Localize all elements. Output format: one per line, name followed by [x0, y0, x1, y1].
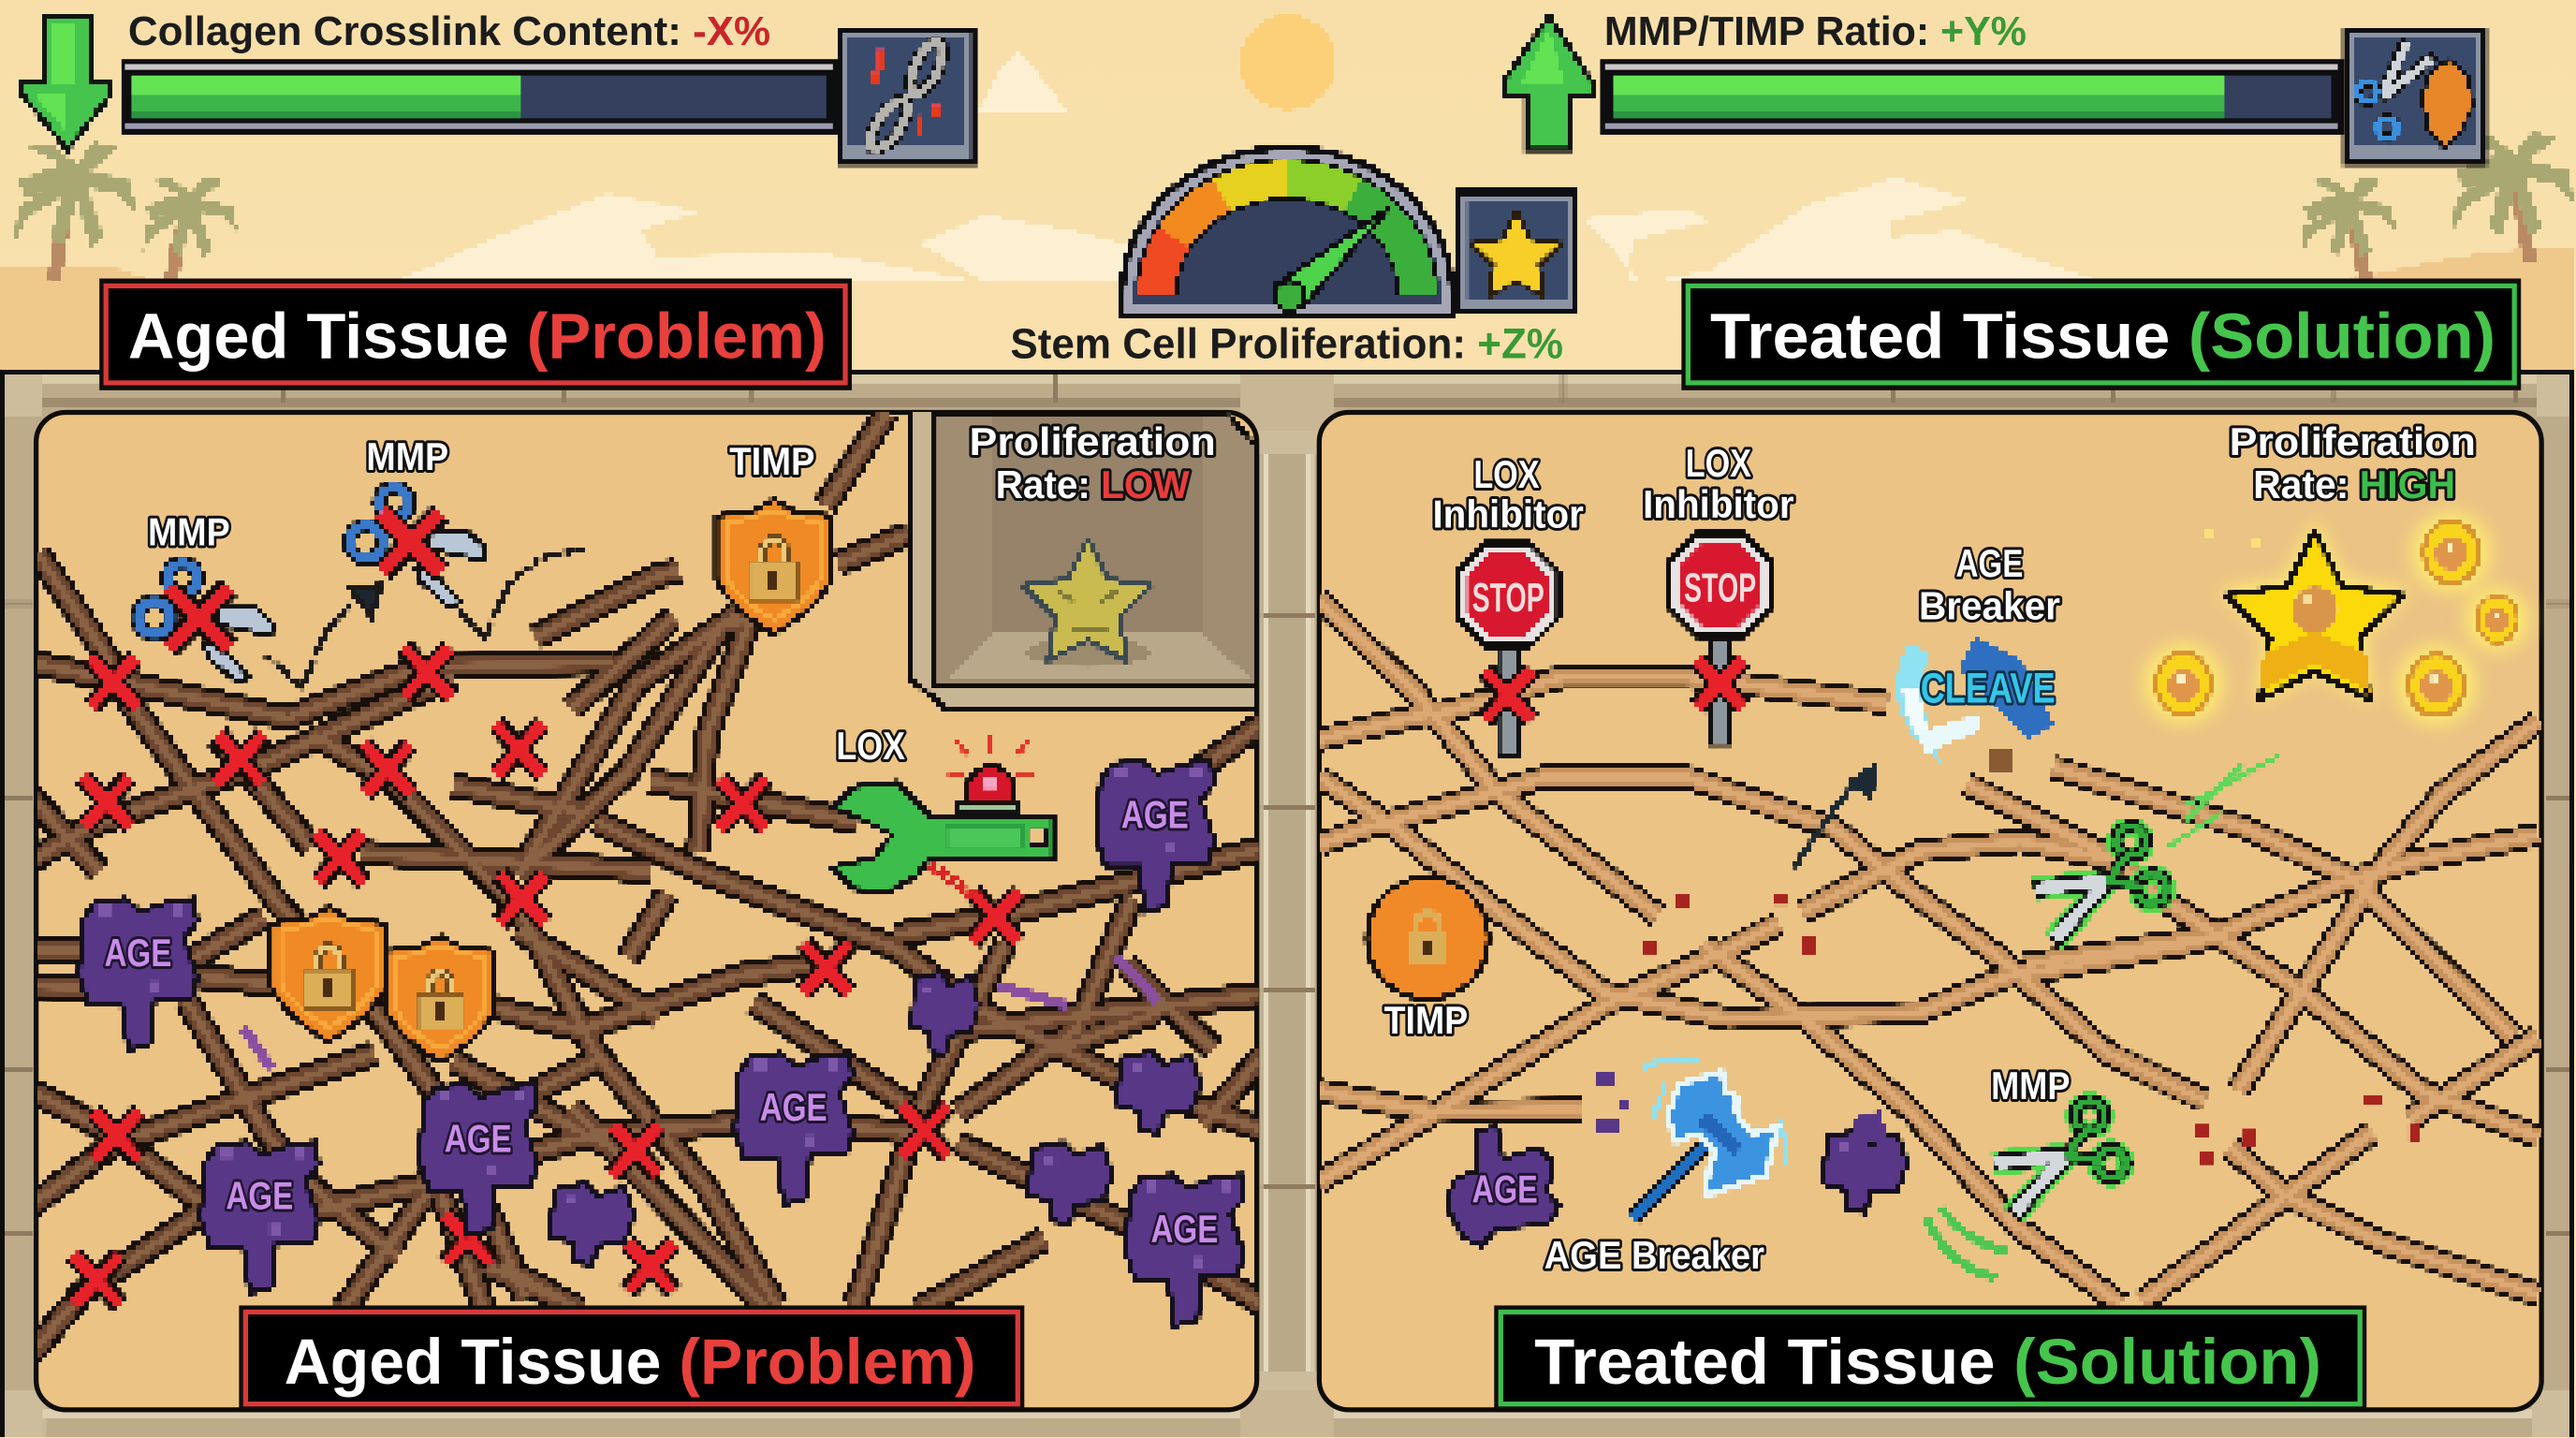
- proliferation rate high: [2144, 419, 2528, 725]
- AGE blob 2: [200, 1142, 318, 1293]
- palm trees: [15, 131, 2574, 283]
- LOX inhibitor 1: LOX: [1473, 452, 1540, 496]
- TIMP circle: TIMP: [1384, 998, 1468, 1042]
- AGE blob 3: [419, 1084, 537, 1236]
- AGE blob treated: [1447, 1127, 1559, 1245]
- icon: twin TIMP shields: [271, 907, 494, 1063]
- icon: stop sign: [1666, 531, 1775, 744]
- LOX inhibitor 2: [1643, 441, 1794, 744]
- icon: stop sign: [1454, 540, 1562, 756]
- heading: aged tissue bottom: [242, 1308, 1022, 1410]
- AGE breaker cleave: CLEAVE: [1921, 664, 2056, 712]
- star glow: [2144, 513, 2528, 725]
- LOX enzyme: [833, 724, 1053, 897]
- panel: aged tissue: [28, 413, 1265, 1410]
- icon: green wrench with alarm: [833, 735, 1053, 897]
- LOX inhibitor 1: Inhibitor: [1432, 492, 1584, 536]
- rate text: Rate: HIGH: [2253, 462, 2455, 506]
- stat: collagen crosslink content: [23, 8, 976, 166]
- unlabeled AGE blobs and smears: [243, 956, 1201, 1265]
- gauge label: Stem Cell Proliferation: +Z%: [1010, 320, 1563, 368]
- icon: green scissors upper: [2034, 756, 2280, 942]
- icon: scissors and shield: [2343, 26, 2487, 166]
- TIMP circle: [1367, 877, 1488, 1042]
- stat label: MMP/TIMP Ratio: +Y%: [1604, 8, 2027, 54]
- AGE blob 5: [1096, 761, 1214, 912]
- icon: broken chain: [836, 26, 976, 166]
- LOX inhibitor 2: Inhibitor: [1643, 482, 1794, 526]
- progress bar: crosslink: [122, 59, 838, 135]
- icon: green scissors: [1925, 1101, 2126, 1278]
- rate text: [2230, 419, 2476, 506]
- gauge dial: [1119, 144, 1456, 317]
- icon: coins: [2154, 520, 2519, 718]
- icon: blocked scissors: [138, 564, 274, 683]
- AGE blob 4: [735, 1053, 853, 1204]
- inset stone box: [909, 413, 1257, 710]
- enzyme: MMP left: [138, 510, 274, 683]
- LOX inhibitor 2: LOX: [1686, 441, 1751, 485]
- AGE blob 2: AGE: [226, 1174, 293, 1218]
- progress bar: ratio: [1600, 59, 2345, 135]
- stat: MMP/TIMP ratio: [1503, 8, 2487, 166]
- collagen fibers: loosened and cleaved: [1319, 600, 2539, 1305]
- stat label: Collagen Crosslink Content: -X%: [128, 8, 770, 54]
- icon: bright star: [2226, 531, 2404, 700]
- AGE blob 4: AGE: [760, 1085, 827, 1129]
- AGE deposits: [79, 761, 1244, 1326]
- panel background: [1319, 413, 2541, 1410]
- arrows: dashed motion paths: [266, 549, 583, 687]
- heading: aged tissue bottom: Aged Tissue (Problem): [285, 1326, 976, 1398]
- AGE blob 1: [79, 899, 198, 1050]
- panel: treated tissue: [1319, 413, 2541, 1410]
- icon: purple blob fragment: [1597, 1071, 1908, 1212]
- TIMP inhibitor shield: [716, 439, 831, 634]
- panel background: [37, 413, 1257, 1410]
- sand dunes: [0, 250, 2576, 394]
- heading: treated tissue top: Treated Tissue (Solution): [1710, 301, 2496, 373]
- icon: blue battle axe: [1633, 1058, 1788, 1219]
- sun: [1240, 15, 1336, 110]
- enzyme: MMP left: MMP: [148, 510, 230, 554]
- red crosslink markers: [74, 648, 1018, 1305]
- AGE breaker cleave: AGE: [1955, 541, 2023, 585]
- enzyme: MMP upper: MMP: [366, 434, 448, 478]
- debris: broken fiber fragments: [1643, 749, 2420, 1164]
- rate text: Proliferation: [2230, 419, 2476, 463]
- collagen fibers: dense crosslinked: [28, 413, 1265, 1356]
- icon: cleave slash: [1794, 638, 2054, 868]
- icon: star box: [1457, 189, 1577, 315]
- heading: aged tissue top: [102, 281, 849, 388]
- gauge: stem cell proliferation: [1010, 144, 1577, 368]
- LOX inhibitor 1: STOP: [1472, 575, 1544, 621]
- stone frame: [0, 372, 2576, 1438]
- AGE breaker cleave: [1794, 541, 2060, 868]
- heading: treated tissue top: [1684, 281, 2519, 388]
- heading: treated tissue bottom: Treated Tissue (Solution): [1534, 1326, 2321, 1398]
- enzyme: MMP upper: [350, 434, 487, 608]
- icon: sad star: [1023, 539, 1151, 661]
- LOX inhibitor 2: STOP: [1684, 565, 1756, 610]
- AGE breaker axe: AGE Breaker: [1544, 1233, 1764, 1277]
- AGE breaker cleave: Breaker: [1919, 584, 2060, 628]
- icon: shield lock: [716, 500, 831, 634]
- LOX enzyme: LOX: [836, 724, 905, 768]
- icon: blocked scissors: [350, 488, 487, 608]
- inset text: Rate: LOW: [996, 462, 1190, 506]
- inset text: [970, 419, 1216, 506]
- AGE breaker axe: [1544, 1058, 1788, 1277]
- icon: TIMP lock badge: [1367, 877, 1488, 999]
- heading: aged tissue top: Aged Tissue (Problem): [128, 301, 827, 373]
- heading: treated tissue bottom: [1497, 1308, 2364, 1410]
- AGE blob 5: AGE: [1121, 793, 1189, 837]
- MMP scissors lower: MMP: [1991, 1064, 2070, 1108]
- AGE blob 6: [1125, 1175, 1244, 1326]
- icon: green down arrow: [23, 18, 110, 150]
- AGE blob 3: AGE: [445, 1116, 512, 1160]
- inset: proliferation rate low: [909, 413, 1257, 710]
- AGE blob treated: AGE: [1472, 1167, 1538, 1211]
- inset text: Proliferation: [970, 419, 1216, 463]
- icon: green up arrow: [1503, 17, 1592, 150]
- MMP scissors lower: [1925, 1064, 2126, 1278]
- AGE blob 1: AGE: [104, 931, 171, 975]
- clouds: [394, 52, 2101, 283]
- TIMP inhibitor shield: TIMP: [729, 439, 815, 483]
- AGE blob 6: AGE: [1150, 1207, 1218, 1251]
- LOX inhibitor 1: [1432, 452, 1584, 756]
